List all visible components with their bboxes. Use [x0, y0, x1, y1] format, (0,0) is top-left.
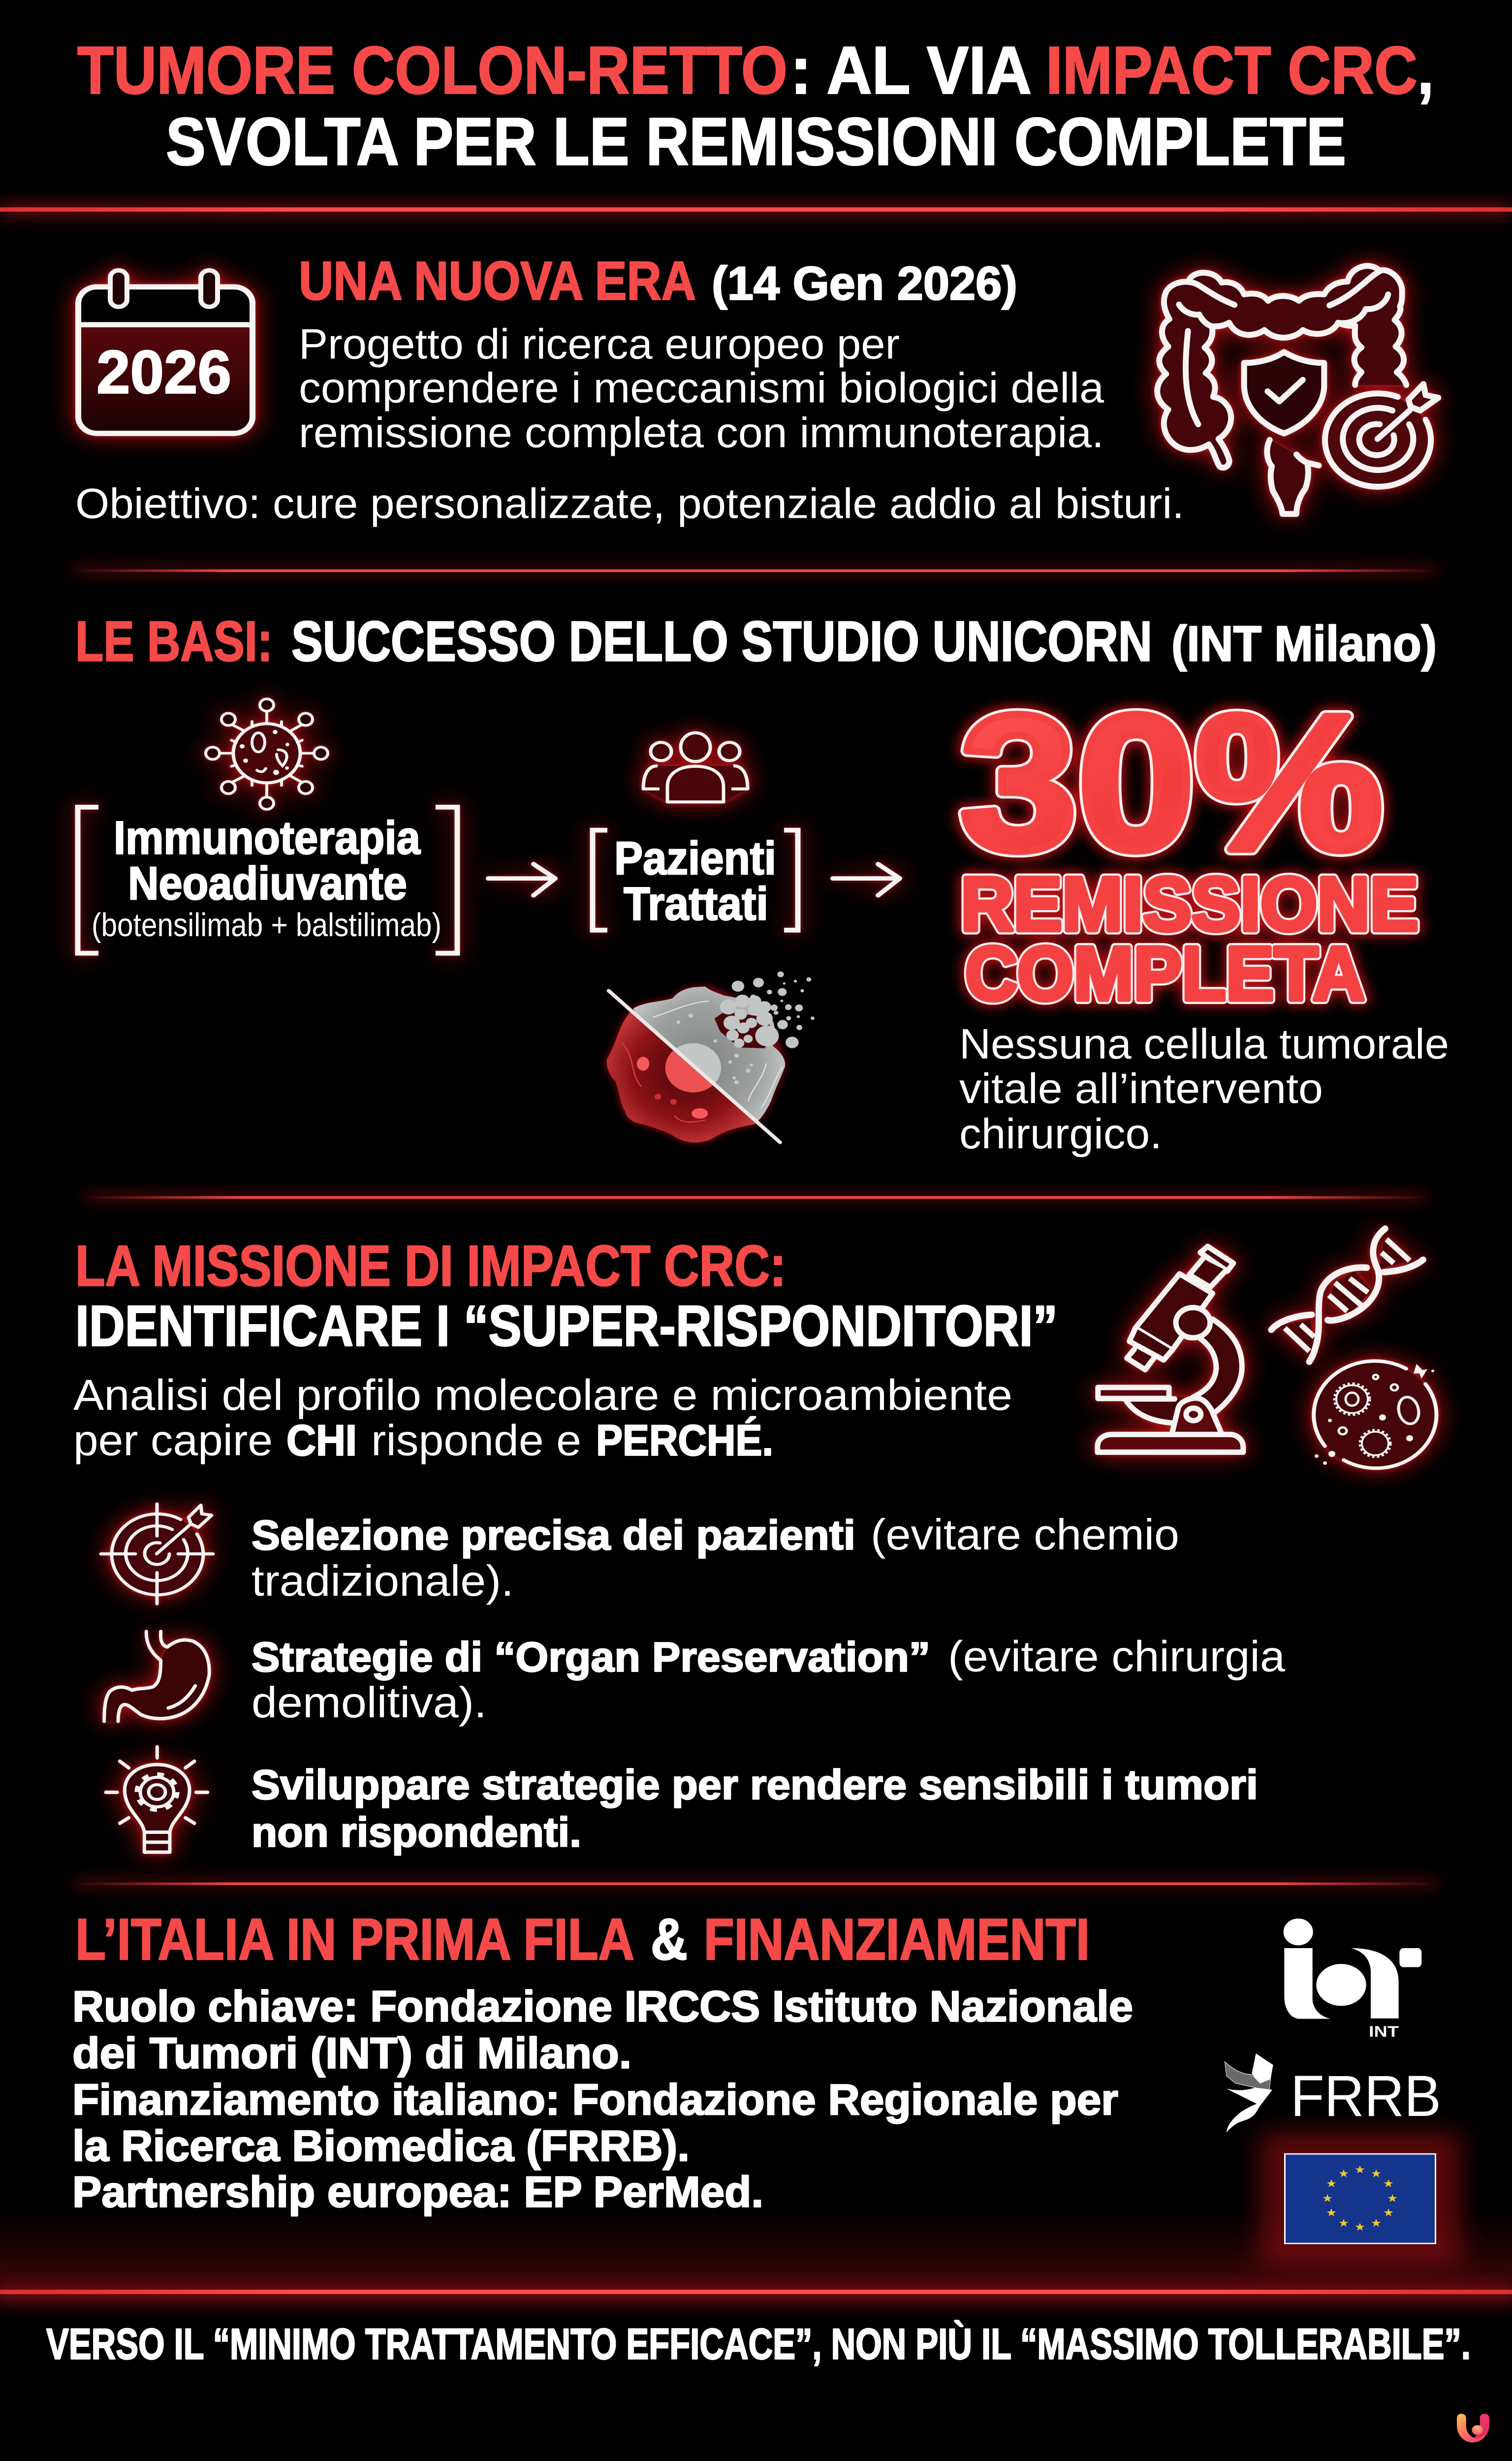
text: obiettivo: Obiettivo: cure personalizzate, potenziale addio al bisturi.: [75, 479, 1184, 527]
title: ,: [1418, 32, 1434, 108]
title: : AL VIA: [790, 32, 1032, 108]
text: organ preservation: [252, 1632, 1286, 1727]
arrow: [488, 864, 555, 895]
text: analisi del profilo: per capire: [73, 1416, 273, 1464]
box: pazienti trattati: Pazienti: [614, 833, 776, 884]
bullet: sviluppare strategie: [106, 1747, 1258, 1856]
icon: petri dish: [1314, 1361, 1436, 1468]
icon: calendar 2026: [78, 270, 252, 433]
stat: 30% remissione completa: COMPLETA: [965, 931, 1365, 1016]
panel: le basi: [75, 609, 1449, 1158]
panel: italia e finanziamenti: [72, 1906, 1460, 2266]
text: analisi del profilo: PERCHÉ.: [596, 1416, 773, 1464]
box: pazienti trattati: [593, 830, 798, 930]
stat: 30% remissione completa: REMISSIONE: [961, 861, 1418, 947]
heading: le basi: LE BASI:: [75, 609, 273, 673]
heading: le basi: (INT Milano): [1171, 616, 1437, 671]
heading: le basi: SUCCESSO DELLO STUDIO UNICORN: [291, 609, 1152, 673]
text: descrizione progetto: Progetto di ricerca europeo per: [299, 320, 900, 368]
text: ruoli e finanziamenti: dei Tumori (INT) di Milano.: [72, 2029, 631, 2077]
heading: la missione: LA MISSIONE DI IMPACT CRC:: [75, 1234, 786, 1298]
icon: group of patients: [643, 733, 748, 802]
heading: italia in prima fila: &: [651, 1906, 688, 1972]
box: immunoterapia neoadiuvante: [78, 807, 457, 953]
arrow: [833, 864, 900, 895]
text: descrizione progetto: remissione completa con immunoterapia.: [299, 409, 1104, 456]
text: organ preservation: Strategie di “Organ Preservation”: [252, 1634, 930, 1680]
logo: FRRB: [1225, 2053, 1441, 2133]
icon: microscope: [1098, 1246, 1243, 1452]
text: ruoli e finanziamenti: [72, 1982, 1133, 2216]
logo: FRRB: FRRB: [1291, 2063, 1441, 2128]
text: descrizione progetto: [299, 320, 1104, 456]
logo: watermark: [1457, 2414, 1489, 2442]
stat: 30% remissione completa: REMISSIONE: [961, 861, 1418, 947]
stat: 30% remissione completa: COMPLETA: [965, 931, 1365, 1016]
text: analisi del profilo: Analisi del profilo molecolare e microambiente: [73, 1371, 1012, 1419]
logo: EU flag: [1260, 2132, 1460, 2266]
text: selezione precisa: (evitare chemio: [871, 1511, 1179, 1559]
icon: calendar 2026: 2026: [96, 338, 231, 406]
stat: 30% remissione completa: 30%: [960, 674, 1383, 890]
text: ruoli e finanziamenti: Finanziamento italiano: Fondazione Regionale per: [72, 2076, 1118, 2124]
stat: 30% remissione completa: 30%: [960, 674, 1383, 890]
text: sviluppare strategie: non rispondenti.: [252, 1809, 581, 1856]
text: ruoli e finanziamenti: Partnership europea: EP PerMed.: [72, 2168, 763, 2216]
text: selezione precisa: [252, 1511, 1179, 1605]
box: immunoterapia neoadiuvante: Neoadiuvante: [128, 858, 407, 910]
icon: target: [101, 1504, 213, 1604]
text: organ preservation: demolitiva).: [252, 1678, 487, 1727]
text: nessuna cellula tumorale: Nessuna cellula tumorale: [959, 1020, 1449, 1068]
logo: INT: INT: [1369, 2023, 1399, 2041]
title: IMPACT CRC: [1046, 32, 1418, 108]
box: immunoterapia neoadiuvante: (botensilimab + balstilimab): [92, 907, 441, 944]
bullet: selezione precisa: [101, 1504, 1179, 1605]
icon: stomach: [104, 1632, 209, 1721]
text: organ preservation: (evitare chirurgia: [948, 1632, 1286, 1680]
icon: light bulb with gear: [106, 1747, 208, 1852]
text: analisi del profilo: CHI: [286, 1416, 357, 1464]
text: nessuna cellula tumorale: chirurgico.: [959, 1109, 1162, 1158]
text: sviluppare strategie: [252, 1762, 1258, 1856]
text: sviluppare strategie: Sviluppare strategie per rendere sensibili i tumori: [252, 1762, 1258, 1808]
text: ruoli e finanziamenti: la Ricerca Biomedica (FRRB).: [72, 2121, 690, 2170]
icon: virus: [206, 699, 328, 809]
text: ruoli e finanziamenti: Ruolo chiave: Fondazione IRCCS Istituto Nazionale: [72, 1982, 1133, 2030]
title: [77, 32, 1434, 179]
heading: la missione: IDENTIFICARE I “SUPER-RISPONDITORI”: [75, 1294, 1058, 1358]
box: immunoterapia neoadiuvante: Immunoterapia: [114, 812, 421, 864]
logo: INT: [1284, 1919, 1421, 2041]
text: analisi del profilo: [73, 1371, 1012, 1464]
text: analisi del profilo: risponde e: [371, 1416, 581, 1464]
heading: la missione: [75, 1234, 1058, 1358]
illustration: tumor cell crossed out: [606, 972, 815, 1142]
heading: una nuova era: (14 Gen 2026): [712, 257, 1017, 310]
stat: 30% remissione completa: 30%: [960, 674, 1383, 890]
text: descrizione progetto: comprendere i meccanismi biologici della: [299, 364, 1104, 411]
bullet: organ preservation: [104, 1632, 1286, 1727]
icon: colon with shield and target: [1157, 266, 1438, 514]
heading: una nuova era: UNA NUOVA ERA: [299, 250, 696, 311]
stat: 30% remissione completa: [960, 674, 1418, 1016]
panel: una nuova era: [75, 250, 1438, 527]
text: selezione precisa: Selezione precisa dei pazienti: [252, 1512, 855, 1559]
icon: dna helix: [1271, 1229, 1423, 1362]
panel: la missione di impact crc: [73, 1229, 1436, 1856]
title: TUMORE COLON-RETTO: [77, 32, 788, 108]
stat: 30% remissione completa: REMISSIONE: [961, 861, 1418, 947]
heading: italia in prima fila: FINANZIAMENTI: [704, 1906, 1090, 1972]
stat: 30% remissione completa: COMPLETA: [965, 931, 1365, 1016]
text: selezione precisa: tradizionale).: [252, 1556, 514, 1605]
heading: italia in prima fila: L’ITALIA IN PRIMA FILA: [75, 1906, 634, 1972]
text: nessuna cellula tumorale: [959, 1020, 1449, 1158]
box: pazienti trattati: Trattati: [624, 878, 768, 930]
text: nessuna cellula tumorale: vitale all’intervento: [959, 1065, 1323, 1112]
